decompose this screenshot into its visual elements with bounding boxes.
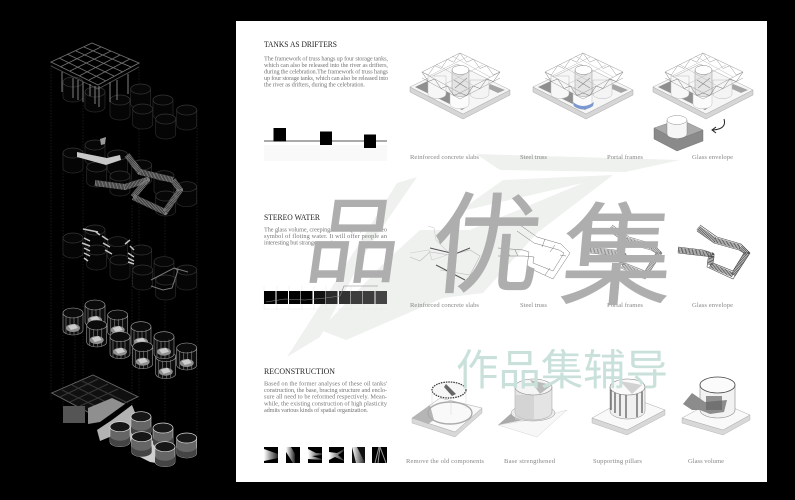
tank step 4: glass volume: [682, 377, 750, 435]
text block: Based on the former analyses of these oil tanks': [264, 380, 387, 387]
row labels 3: [406, 458, 724, 465]
row labels 2: Reinforced concrete slabs: [410, 302, 479, 309]
ribbon: portal: [590, 225, 662, 279]
white tanks layer: [63, 300, 197, 379]
row labels 1: Steel truss: [520, 154, 547, 161]
ground layer: [52, 375, 197, 467]
panel: exploded axonometric: [51, 43, 197, 467]
watermark: brush characters: 品: [299, 167, 412, 303]
heading: TANKS AS DRIFTERS: [264, 40, 337, 49]
truss grid layer: [51, 43, 139, 107]
row labels 3: Base strengthened: [504, 458, 556, 465]
text block: while, the existing construction of high plasticity: [264, 400, 388, 407]
guide lines: [51, 62, 197, 440]
row labels 3: Glass volume: [688, 458, 724, 465]
chart: floating blocks: [264, 128, 387, 160]
dark tank layers: [63, 77, 197, 300]
row labels 3: Remove the old components: [406, 458, 484, 465]
text block: The framework of truss hangs up four storage tanks,: [264, 56, 388, 62]
watermark: brush characters: 集: [555, 167, 681, 329]
section: tanks as drifters: [264, 40, 389, 160]
text block: symbol of floting water. It will offer people an: [264, 233, 388, 240]
ribbon diagrams: [410, 225, 750, 280]
row labels 3: Supporting pillars: [593, 458, 642, 465]
text block: which can also be released into the river as drifters,: [264, 62, 388, 69]
text block: interesting but strange experience.: [264, 240, 345, 247]
heading: STEREO WATER: [264, 213, 321, 222]
watermark: teal caption: 作品集辅导: [456, 348, 668, 395]
tank step 2: base strengthened: [498, 379, 567, 437]
text block: up four storage tanks, which can also be released into: [264, 75, 388, 82]
row labels 2: Portal frames: [607, 302, 643, 309]
row labels 1: Glass envelope: [692, 154, 733, 161]
arrow: [712, 119, 725, 133]
small ramps layer: [82, 229, 188, 290]
section: stereo water: [264, 213, 388, 310]
text block: admits various kinds of spatial organization.: [264, 407, 368, 414]
ribbon: slabs: [410, 226, 480, 280]
text block: during the celebration.The framework of truss hangs: [264, 68, 389, 76]
row labels 2: Glass envelope: [692, 302, 733, 309]
tank step 3: supporting pillars: [592, 379, 665, 435]
text block: the river as drifters, during the celebration.: [264, 82, 365, 88]
row labels 1: Portal frames: [607, 154, 643, 161]
ribbon: truss: [498, 225, 570, 279]
text block: The glass volume, creeping across Qi-Ji, is a stereo: [264, 226, 387, 233]
icons: sequence squares: [264, 447, 387, 463]
tank assemblies: [410, 53, 753, 119]
text block: sure all need to be reformed respectively. Mean-: [264, 394, 387, 401]
panel: white board: [236, 21, 767, 482]
heading: RECONSTRUCTION: [264, 367, 335, 376]
row labels 2: Steel truss: [520, 302, 547, 309]
text block: [264, 56, 389, 88]
text block: construction, the base, bracing structure and enclo-: [264, 387, 387, 394]
row labels 2: [410, 302, 733, 309]
tank step 1: remove old components: [412, 382, 482, 437]
chart: gradient strip: [264, 286, 387, 310]
glass envelope detail: [654, 116, 703, 151]
watermark: brush characters: [299, 156, 681, 329]
text block: [264, 380, 388, 414]
blue water band: [573, 102, 594, 110]
ribbon: envelope: [678, 225, 750, 279]
floating ribbon layer: [77, 137, 180, 212]
row labels 1: Reinforced concrete slabs: [410, 154, 479, 161]
text block: [264, 226, 388, 247]
watermark: brush characters: 优: [425, 156, 549, 316]
watermark swoosh: [287, 154, 680, 357]
section: reconstruction: [264, 367, 388, 463]
row labels 1: [410, 154, 733, 161]
